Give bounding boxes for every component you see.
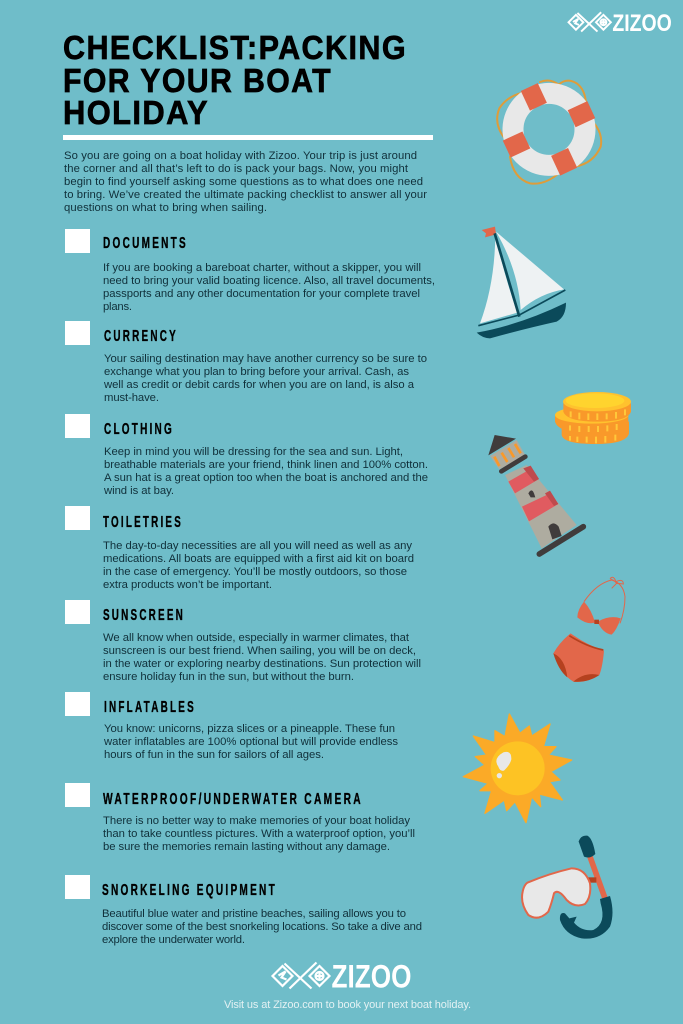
body text: A sun hat is a great option too when the boat is anchored and the	[104, 472, 428, 484]
body text: The day-to-day necessities are all you will need as well as any	[103, 540, 412, 552]
body text: need to bring your valid boating licence. Also, all travel documents,	[103, 275, 435, 287]
panel: snorkeling equipment	[65, 875, 422, 946]
heading: CLOTHING	[104, 421, 174, 438]
body text	[103, 540, 414, 591]
body text	[103, 353, 427, 404]
body text: There is no better way to make memories of your boat holiday	[103, 815, 410, 827]
body text	[103, 446, 428, 497]
logo: top right Zizoo	[568, 10, 672, 37]
body text: We all know when outside, especially in warmer climates, that	[103, 632, 410, 644]
panel: currency	[65, 321, 427, 404]
checkbox	[65, 600, 90, 624]
body text: breathable materials are your friend, think linen and 100% cotton.	[104, 459, 428, 471]
body text: You know: unicorns, pizza slices or a pineapple. These fun	[104, 723, 395, 735]
heading: SUNSCREEN	[103, 607, 185, 624]
logo: bottom Zizoo	[272, 958, 412, 994]
body text: explore the underwater world.	[102, 934, 245, 946]
checkbox	[65, 692, 90, 716]
icon: snorkel and mask	[522, 836, 612, 939]
body text: Your sailing destination may have another currency so be sure to	[104, 353, 427, 365]
heading: INFLATABLES	[104, 699, 196, 716]
panel: waterproof camera	[65, 783, 415, 853]
icon: gold coins	[555, 392, 631, 444]
body text: water inflatables are 100% optional but will provide endless	[103, 736, 398, 748]
icon: bikini	[553, 577, 625, 682]
body text: wind is at bay.	[103, 485, 174, 497]
body text: discover some of the best snorkeling locations. So take a dive and	[102, 921, 422, 933]
body text: passports and any other documentation for your complete travel	[103, 288, 420, 300]
panel: clothing	[65, 414, 428, 497]
icon: sun	[463, 714, 572, 823]
logo: top right Zizoo: ZIZOO	[612, 10, 672, 37]
body text: must-have.	[104, 392, 159, 404]
title: FOR YOUR BOAT	[63, 62, 332, 99]
footer text: Visit us at Zizoo.com to book your next boat holiday.	[224, 999, 471, 1011]
panel: inflatables	[65, 692, 398, 761]
body text: Beautiful blue water and pristine beaches, sailing allows you to	[102, 908, 406, 920]
intro text: to bring. We’ve created the ultimate packing checklist to answer all your	[64, 189, 427, 201]
body text: medications. All boats are equipped with a first aid kit on board	[103, 553, 414, 565]
heading: DOCUMENTS	[103, 235, 188, 252]
title: CHECKLIST:PACKING	[63, 29, 407, 66]
checkbox	[65, 321, 90, 345]
heading: TOILETRIES	[103, 514, 183, 531]
title underline	[63, 135, 433, 140]
title: HOLIDAY	[63, 94, 209, 131]
panel: sunscreen	[65, 600, 421, 683]
body text: extra products won’t be important.	[103, 579, 272, 591]
checkbox	[65, 875, 90, 899]
body text: Keep in mind you will be dressing for the sea and sun. Light,	[104, 446, 403, 458]
icon: sailboat	[477, 227, 566, 338]
title	[63, 29, 407, 131]
panel: documents	[65, 229, 435, 313]
checkbox	[65, 229, 90, 253]
body text: plans.	[103, 301, 132, 313]
body text: ensure holiday fun in the sun, but without the burn.	[103, 671, 354, 683]
icon: lighthouse	[488, 435, 583, 554]
heading: CURRENCY	[104, 328, 178, 345]
intro text: questions on what to bring when sailing.	[64, 202, 267, 214]
heading: WATERPROOF/UNDERWATER CAMERA	[103, 791, 363, 808]
body text	[103, 632, 421, 683]
heading: SNORKELING EQUIPMENT	[102, 882, 277, 899]
body text: well as credit or debit cards for when you are on land, is also a	[103, 379, 415, 391]
icon: life ring	[487, 67, 611, 191]
intro text	[64, 150, 427, 214]
body text: than to take countless pictures. With a waterproof option, you’ll	[103, 828, 415, 840]
body text: hours of fun in the sun for sailors of all ages.	[104, 749, 324, 761]
body text: be sure the memories remain lasting without any damage.	[103, 841, 390, 853]
body text	[103, 262, 435, 313]
body text: sunscreen is our best friend. When sailing, you will be on deck,	[103, 645, 416, 657]
intro text: So you are going on a boat holiday with Zizoo. Your trip is just around	[64, 150, 417, 162]
checkbox	[65, 506, 90, 530]
intro text: begin to find yourself asking some questions as to what does one need	[64, 176, 423, 188]
body text: exchange what you plan to bring before your arrival. Cash, as	[104, 366, 409, 378]
panel: toiletries	[65, 506, 414, 591]
body text: in the water or exploring nearby destinations. Sun protection will	[103, 658, 421, 670]
body text	[103, 815, 415, 853]
checkbox	[65, 783, 90, 807]
logo: bottom Zizoo: ZIZOO	[332, 958, 412, 994]
intro text: the corner and all that’s left to do is pack your bags. Now, you might	[64, 163, 409, 175]
body text	[103, 723, 398, 761]
body text: If you are booking a bareboat charter, without a skipper, you will	[103, 262, 421, 274]
body text: in the case of emergency. You’ll be mostly outdoors, so those	[103, 566, 407, 578]
checkbox	[65, 414, 90, 438]
body text	[102, 908, 422, 946]
